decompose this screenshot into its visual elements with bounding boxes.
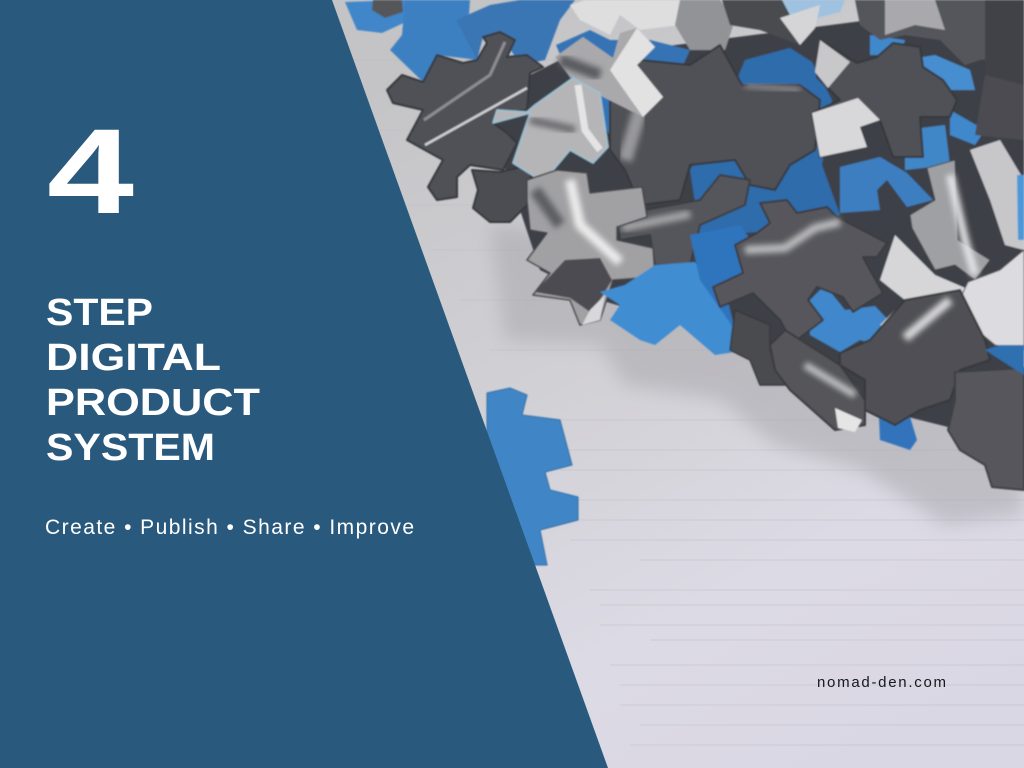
piece: silver, right column xyxy=(910,140,1024,280)
website credit: nomad-den.com xyxy=(817,674,946,691)
piece: dark, bottom right corner xyxy=(948,368,1024,490)
piece: dark, large, centre top xyxy=(610,45,820,205)
large numeral 4: 4 xyxy=(47,103,134,239)
piece: blue showing through centre right xyxy=(810,285,893,352)
piece: silver, top centre xyxy=(555,28,663,117)
blue pieces at top xyxy=(345,0,410,33)
diagonal blue panel xyxy=(0,0,608,768)
piece: dark, lower centre right xyxy=(840,290,990,425)
subtitle: Create • Publish • Share • Improve xyxy=(45,516,414,539)
photo background: table surface xyxy=(320,0,1024,768)
piece: silver and dark, lower left xyxy=(527,170,655,325)
blue pieces in the middle xyxy=(690,48,840,235)
piece: bright blue, lower centre xyxy=(600,262,737,355)
piece: dark with white corner, upper right xyxy=(812,40,957,157)
piece: dark, large centre right xyxy=(713,200,887,343)
piece: dark behind the silver piece xyxy=(472,165,532,222)
photo: puzzle pile xyxy=(345,0,1024,490)
photo: soft shadow below the puzzle pile xyxy=(490,225,1024,525)
title xyxy=(46,292,260,469)
title line: system: SYSTEM xyxy=(46,427,215,469)
piece: dark with silver swirl, left xyxy=(387,32,543,200)
silver and dark pieces, top row xyxy=(570,0,680,35)
piece: dark, far lower under the pile xyxy=(730,310,790,385)
piece: white star, centre right xyxy=(880,235,970,340)
title line: step: STEP xyxy=(46,292,153,334)
title line: digital: DIGITAL xyxy=(46,337,221,379)
piece: white star, far right xyxy=(955,250,1024,350)
piece: silver, left centre xyxy=(493,78,608,182)
piece: dark, arm reaching right xyxy=(617,175,750,265)
pile base xyxy=(480,0,1024,440)
piece: dark, small lower xyxy=(770,330,865,432)
title line: product: PRODUCT xyxy=(46,382,260,424)
photo: lone blue puzzle piece xyxy=(487,388,578,565)
